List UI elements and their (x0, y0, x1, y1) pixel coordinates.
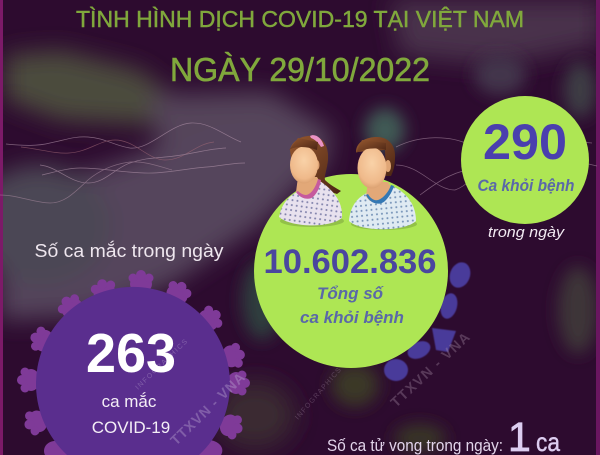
daily recovered label: Ca khỏi bệnh (478, 176, 574, 195)
icon: small blue virus spikes (384, 259, 474, 381)
panel: total recovered circle (254, 174, 448, 368)
decorative wave lines, right (396, 138, 597, 195)
watermark: TTXVN - VNA (387, 329, 473, 410)
watermark on virus: INFOGRAPHICS (135, 338, 189, 391)
icon: male patient (349, 137, 417, 230)
panel: daily recovered circle (461, 96, 589, 224)
watermark: INFOGRAPHICS (294, 367, 343, 421)
virus body (36, 287, 230, 455)
daily recovered number: 290 (483, 114, 567, 170)
total recovered label: Tổng số (317, 284, 385, 303)
title: TÌNH HÌNH DỊCH COVID-19 TẠI VIỆT NAM (76, 6, 524, 32)
panel: virus with daily cases (17, 270, 250, 455)
virus spikes (17, 270, 250, 455)
daily recovered caption: trong ngày (488, 224, 566, 241)
daily deaths line (327, 414, 560, 455)
watermark (294, 329, 473, 421)
daily cases heading: Số ca mắc trong ngày (34, 240, 224, 261)
total recovered label: ca khỏi bệnh (300, 308, 404, 327)
daily cases label: COVID-19 (92, 418, 170, 437)
daily deaths line: Số ca tử vong trong ngày: (327, 436, 503, 455)
total recovered number: 10.602.836 (264, 243, 436, 281)
decorative wave lines, left (0, 123, 245, 203)
watermark on virus (135, 338, 248, 448)
daily cases label: ca mắc (102, 392, 157, 411)
date heading: NGÀY 29/10/2022 (170, 51, 430, 88)
daily cases number: 263 (86, 322, 176, 384)
icon: female patient (279, 135, 344, 227)
watermark on virus: TTXVN - VNA (167, 369, 248, 448)
